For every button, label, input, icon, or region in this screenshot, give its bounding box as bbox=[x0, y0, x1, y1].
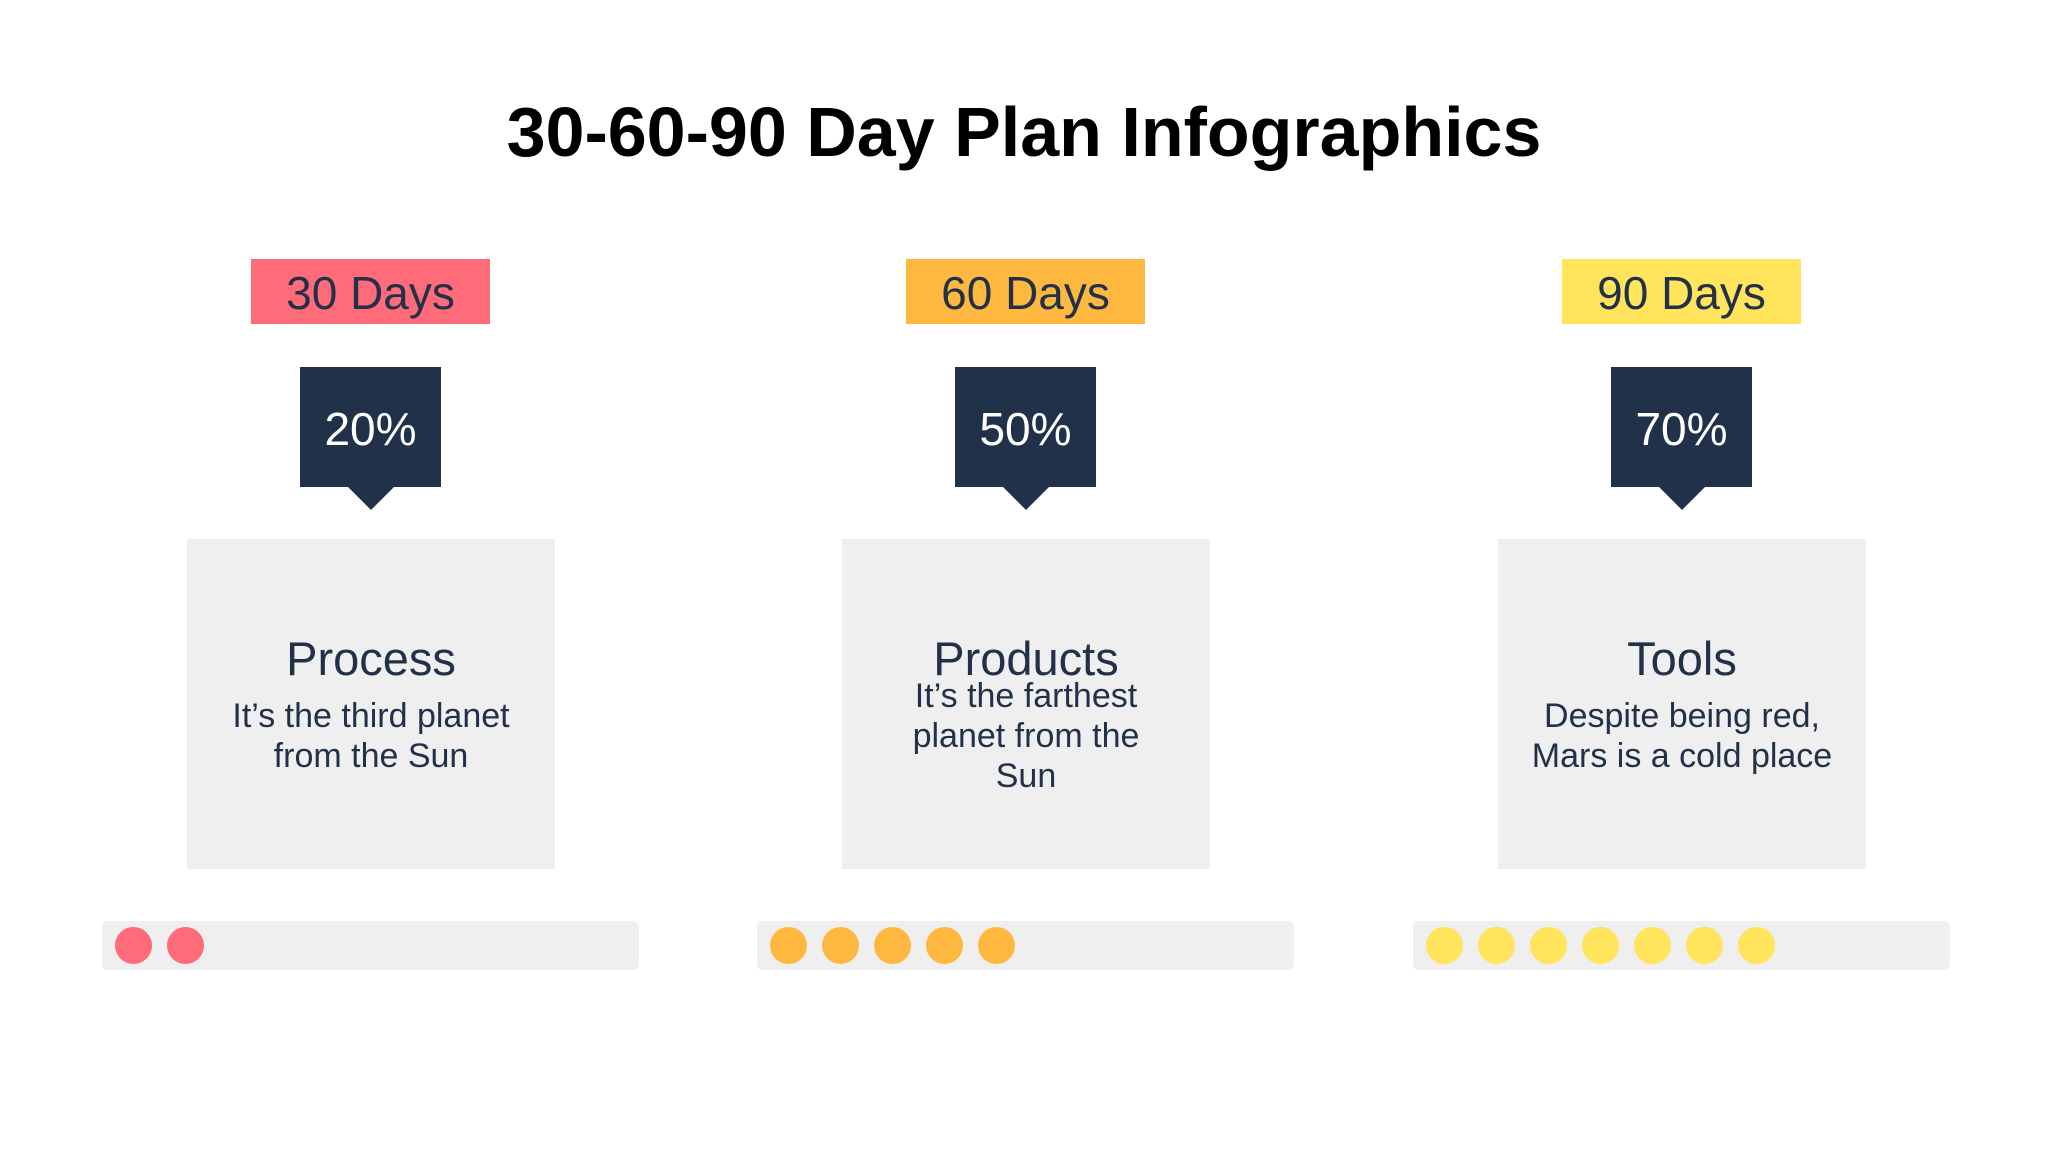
card: Tools: Despite being red, bbox=[1544, 697, 1820, 735]
progress bar: 2 dots bbox=[102, 921, 639, 970]
panel: 30 days bbox=[102, 259, 639, 970]
percentage: 70% bbox=[1611, 367, 1752, 487]
tag: 60 Days bbox=[906, 259, 1145, 324]
card: Process: Process bbox=[286, 632, 456, 685]
card: Tools bbox=[1498, 539, 1866, 869]
percentage: 50%: 50% bbox=[979, 403, 1072, 455]
percentage: 70%: 70% bbox=[1635, 403, 1728, 455]
card: Tools: Mars is a cold place bbox=[1532, 737, 1832, 775]
panel: 90 days bbox=[1413, 259, 1950, 970]
progress bar: 5 dots bbox=[757, 921, 1294, 970]
title: 30-60-90 Day Plan Infographics bbox=[507, 93, 1541, 171]
card: Process: It’s the third planet bbox=[232, 697, 510, 735]
card: Products bbox=[842, 539, 1210, 869]
percentage: 20%: 20% bbox=[324, 403, 417, 455]
tag: 90 Days: 90 Days bbox=[1597, 267, 1766, 319]
card: Products: Products bbox=[933, 632, 1119, 685]
tag: 30 Days bbox=[251, 259, 490, 324]
percentage: 20% bbox=[300, 367, 441, 487]
panel: 60 days bbox=[757, 259, 1294, 970]
tag: 90 Days bbox=[1562, 259, 1801, 324]
tag: 30 Days: 30 Days bbox=[286, 267, 455, 319]
card: Products: planet from the bbox=[913, 717, 1139, 755]
percentage: 50% bbox=[955, 367, 1096, 487]
card: Products: It’s the farthest bbox=[915, 677, 1137, 715]
card: Products: Sun bbox=[996, 757, 1056, 795]
card: Process bbox=[187, 539, 555, 869]
card: Process: from the Sun bbox=[274, 737, 468, 775]
card: Tools: Tools bbox=[1627, 632, 1737, 685]
tag: 60 Days: 60 Days bbox=[941, 267, 1110, 319]
progress bar: 7 dots bbox=[1413, 921, 1950, 970]
